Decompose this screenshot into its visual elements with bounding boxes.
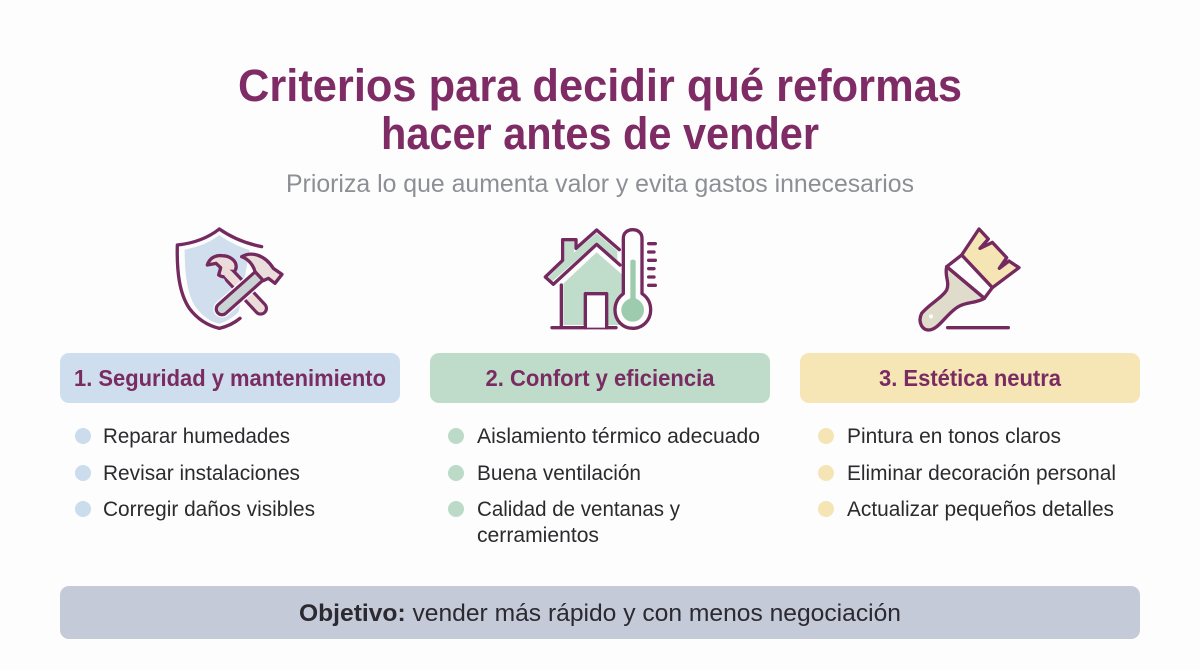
panel: seguridad y mantenimiento xyxy=(60,353,400,521)
title xyxy=(238,60,962,159)
heading: confort xyxy=(430,353,770,403)
wrench handle xyxy=(231,277,261,308)
heading: seguridad xyxy=(60,353,400,403)
callout: objetivo xyxy=(60,586,1140,639)
subtitle: Prioriza lo que aumenta valor y evita gastos innecesarios xyxy=(286,170,914,198)
heading: estética xyxy=(800,353,1140,403)
panel: estética neutra xyxy=(800,353,1140,521)
heading: confort: 2. Confort y eficiencia xyxy=(486,365,715,391)
icon: shield with tools xyxy=(177,229,282,328)
heading: estética: 3. Estética neutra xyxy=(879,365,1061,391)
panel: confort y eficiencia xyxy=(430,353,770,547)
list: confort: Buena ventilación xyxy=(477,462,641,485)
hammer handle xyxy=(222,277,258,309)
list: confort: Calidad de ventanas y xyxy=(477,498,680,521)
callout: objetivo: Objetivo: vender más rápido y con menos negociación xyxy=(299,600,901,627)
list: seguridad: Revisar instalaciones xyxy=(103,462,300,485)
wrench head xyxy=(207,256,236,277)
icon: paintbrush xyxy=(920,229,1019,330)
hammer head xyxy=(242,254,282,283)
list: seguridad xyxy=(75,425,315,521)
list: confort: cerramientos xyxy=(477,524,599,547)
list: estética: Actualizar pequeños detalles xyxy=(847,498,1114,521)
title: Criterios para decidir qué reformas xyxy=(238,60,962,111)
list: confort: Aislamiento térmico adecuado xyxy=(477,425,760,448)
icon: house with thermometer xyxy=(545,230,655,328)
list: seguridad: Reparar humedades xyxy=(103,425,290,448)
list: estética: Pintura en tonos claros xyxy=(847,425,1061,448)
list: estética: Eliminar decoración personal xyxy=(847,462,1116,485)
list: estética xyxy=(818,425,1116,521)
title: hacer antes de vender xyxy=(381,108,819,159)
list: seguridad: Corregir daños visibles xyxy=(103,498,315,521)
list: confort xyxy=(448,425,760,547)
heading: seguridad: 1. Seguridad y mantenimiento xyxy=(74,365,386,391)
